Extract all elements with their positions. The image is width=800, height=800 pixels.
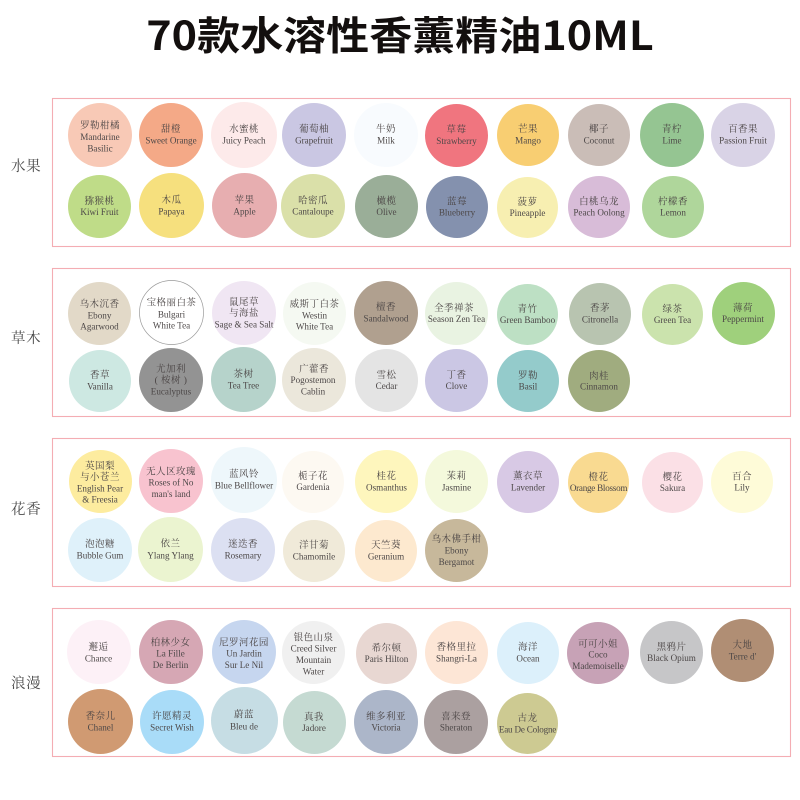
swatch: Milk: [354, 103, 418, 167]
swatch: Juicy Peach: [211, 102, 277, 168]
swatch: Cantaloupe: Cantaloupe: [292, 207, 334, 217]
swatch: Olive: Olive: [376, 207, 397, 217]
swatch: Black Opium: 黑鸦片: [657, 641, 686, 653]
swatch: Clove: Clove: [446, 381, 467, 391]
swatch: Terre d': Terre d': [729, 651, 757, 661]
swatch: Lavender: 薰衣草: [513, 470, 543, 482]
swatch: Terre d': [711, 619, 774, 682]
swatch: Green Tea: Green Tea: [654, 315, 691, 325]
swatch: Shangri-La: 香格里拉: [437, 641, 476, 653]
swatch: Westin White Tea: 威斯丁白茶: [290, 298, 339, 310]
swatch: Chanel: [68, 689, 133, 754]
swatch: Mandarine Basilic: 罗勒柑橘: [80, 120, 120, 132]
swatch: Mandarine Basilic: Mandarine: [80, 132, 120, 142]
swatch: Cantaloupe: 哈密瓜: [298, 194, 328, 206]
swatch: Apple: [212, 173, 277, 238]
swatch: Coco Mademoiselle: 可可小姐: [578, 638, 618, 650]
swatch: Lily: Lily: [734, 483, 750, 493]
swatch: Jasmine: 茉莉: [447, 470, 466, 482]
swatch: Clove: 丁香: [447, 369, 466, 381]
swatch: Chance: Chance: [85, 653, 112, 663]
swatch: Jasmine: [425, 450, 488, 513]
swatch: Sage & Sea Salt: Sage & Sea Salt: [215, 319, 274, 329]
swatch: Jadore: [283, 691, 346, 754]
swatch: Juicy Peach: Juicy Peach: [222, 136, 266, 146]
swatch: Lily: 百合: [732, 470, 752, 482]
swatch: Chamomile: 洋甘菊: [299, 539, 329, 551]
swatch: Papaya: [139, 173, 204, 238]
swatch: Un Jardin Sur Le Nil: Sur Le Nil: [225, 660, 264, 670]
swatch: Chamomile: Chamomile: [293, 551, 335, 561]
swatch: Eucalyptus: [139, 348, 203, 412]
swatch: Ocean: [497, 622, 559, 684]
swatch: Bubble Gum: Bubble Gum: [77, 551, 123, 561]
swatch: Ylang Ylang: 依兰: [161, 538, 180, 550]
swatch: Tea Tree: [211, 347, 276, 412]
swatch: Green Bamboo: 青竹: [518, 303, 537, 315]
swatch: Sheraton: 喜来登: [441, 710, 471, 722]
swatch: Eau De Cologne: [497, 693, 558, 754]
swatch: Bleu de: Bleu de: [230, 721, 258, 731]
swatch: Blue Bellflower: Blue Bellflower: [215, 481, 273, 491]
swatch: Blueberry: Blueberry: [439, 207, 476, 217]
swatch: Eucalyptus: 尤加利: [156, 363, 186, 375]
swatch: Creed Silver Mountain Water: Water: [303, 666, 324, 676]
swatch: Gardenia: [282, 451, 344, 513]
heading: 水果: 水果: [11, 158, 41, 175]
swatch: English Pear & Freesia: 与小苍兰: [80, 471, 120, 483]
swatch: Sweet Orange: [139, 103, 203, 167]
swatch: Geranium: 天竺葵: [371, 539, 401, 551]
swatch: Season Zen Tea: [425, 282, 488, 345]
swatch: Black Opium: [640, 621, 703, 684]
swatch: Sakura: [642, 452, 703, 513]
swatch: Lily: [711, 451, 773, 513]
swatch: Jadore: Jadore: [302, 723, 326, 733]
swatch: Osmanthus: Osmanthus: [366, 482, 407, 492]
swatch: Pogostemon Cablin: 广藿香: [299, 363, 329, 375]
panel: 花香: [52, 438, 790, 586]
swatch: Cantaloupe: [281, 174, 345, 238]
swatch: Westin White Tea: [283, 282, 346, 345]
swatch: Roses of No man's land: [139, 449, 203, 513]
swatch: Eau De Cologne: 古龙: [518, 712, 537, 724]
swatch: Ebony Agarwood: Agarwood: [80, 322, 119, 332]
swatch: Osmanthus: 桂花: [377, 470, 396, 482]
swatch: Paris Hilton: 希尔顿: [372, 642, 401, 654]
swatch: Ebony Agarwood: [68, 282, 131, 345]
swatch: Lime: Lime: [662, 135, 682, 145]
swatch: Paris Hilton: [356, 623, 417, 684]
swatch: Sheraton: [424, 690, 488, 754]
swatch: Creed Silver Mountain Water: Mountain: [296, 655, 332, 665]
swatch: Ylang Ylang: Ylang Ylang: [147, 550, 194, 560]
swatch: Roses of No man's land: man's land: [152, 489, 191, 499]
swatch: Un Jardin Sur Le Nil: Un Jardin: [226, 649, 262, 659]
swatch: Vanilla: 香草: [90, 369, 110, 381]
swatch: Un Jardin Sur Le Nil: 尼罗河花园: [219, 636, 269, 648]
swatch: Cinnamon: Cinnamon: [580, 382, 618, 392]
swatch: La Fille De Berlin: De Berlin: [153, 660, 189, 670]
swatch: Creed Silver Mountain Water: Creed Silver: [291, 644, 336, 654]
swatch: Tea Tree: 茶树: [234, 368, 253, 380]
swatch: Bulgari White Tea: Bulgari: [158, 309, 186, 319]
swatch: Clove: [425, 349, 488, 412]
swatch: Apple: Apple: [233, 206, 256, 216]
swatch: Season Zen Tea: 全季禅茶: [434, 302, 474, 314]
swatch: English Pear & Freesia: 英国梨: [85, 460, 115, 472]
swatch: Eucalyptus: Eucalyptus: [151, 387, 192, 397]
swatch: Terre d': 大地: [733, 639, 752, 651]
swatch: Paris Hilton: Paris Hilton: [365, 654, 409, 664]
swatch: Roses of No man's land: 无人区玫瑰: [146, 466, 196, 478]
swatch: Basil: [497, 350, 559, 412]
swatch: Olive: [355, 175, 418, 238]
swatch: Strawberry: [425, 104, 488, 167]
swatch: Blue Bellflower: 蓝风铃: [229, 468, 259, 480]
swatch: Milk: 牛奶: [376, 123, 396, 135]
swatch: Coco Mademoiselle: Mademoiselle: [572, 661, 624, 671]
swatch: Kiwi Fruit: [68, 175, 131, 238]
swatch: Ocean: 海洋: [518, 641, 538, 653]
swatch: Sakura: 樱花: [663, 471, 682, 483]
swatch: Secret Wish: 许愿精灵: [152, 710, 192, 722]
swatch: Geranium: Geranium: [368, 551, 404, 561]
swatch: Papaya: Papaya: [158, 206, 185, 216]
swatch: Citronella: [569, 283, 631, 345]
swatch: Roses of No man's land: Roses of No: [149, 478, 194, 488]
swatch: Blueberry: [426, 176, 488, 238]
swatch: Strawberry: Strawberry: [436, 136, 477, 146]
swatch: Secret Wish: Secret Wish: [150, 723, 194, 733]
swatch: Ebony Agarwood: 乌木沉香: [80, 298, 119, 310]
swatch: Kiwi Fruit: Kiwi Fruit: [80, 207, 119, 217]
swatch: Blueberry: 蓝莓: [447, 196, 467, 208]
swatch: Victoria: [354, 690, 418, 754]
swatch: Chamomile: [283, 520, 345, 582]
swatch: English Pear & Freesia: [69, 450, 132, 513]
swatch: Lavender: Lavender: [511, 483, 545, 493]
swatch: Cedar: Cedar: [376, 381, 397, 391]
swatch: Secret Wish: [140, 690, 204, 754]
swatch: Shangri-La: Shangri-La: [436, 653, 477, 663]
swatch: Citronella: Citronella: [582, 314, 618, 324]
swatch: Mango: 芒果: [518, 123, 538, 135]
swatch: Lemon: 柠檬香: [658, 196, 688, 208]
swatch: Ebony Bergamot: [425, 519, 488, 582]
swatch: Bulgari White Tea: 宝格丽白茶: [147, 296, 196, 308]
swatch: Sakura: Sakura: [660, 483, 685, 493]
swatch: Gardenia: 栀子花: [298, 470, 328, 482]
swatch: Peach Oolong: 白桃乌龙: [579, 196, 619, 208]
swatch: Bulgari White Tea: [140, 280, 204, 344]
swatch: Bleu de: [211, 687, 278, 754]
swatch: Sage & Sea Salt: 与海盐: [229, 307, 259, 319]
swatch: Mango: Mango: [515, 135, 541, 145]
swatch: Season Zen Tea: Season Zen Tea: [428, 314, 485, 324]
swatch: Creed Silver Mountain Water: [282, 621, 345, 684]
swatch: Peppermint: Peppermint: [722, 314, 764, 324]
swatch: Grapefruit: [282, 103, 346, 167]
swatch: La Fille De Berlin: La Fille: [156, 649, 185, 659]
swatch: Pineapple: [497, 177, 558, 238]
swatch: Bubble Gum: [68, 518, 132, 582]
swatch: Eucalyptus: ( 桉树 ): [155, 374, 187, 386]
swatch: Gardenia: Gardenia: [296, 482, 330, 492]
swatch: Green Bamboo: Green Bamboo: [500, 315, 556, 325]
swatch: Pogostemon Cablin: [282, 348, 346, 412]
swatch: Cinnamon: [568, 350, 630, 412]
swatch: Ebony Agarwood: Ebony: [88, 310, 112, 320]
swatch: Green Tea: [642, 284, 703, 345]
swatch: Passion Fruit: [711, 103, 775, 167]
panel: 草木: [52, 268, 790, 416]
swatch: Pogostemon Cablin: Pogostemon: [291, 375, 336, 385]
swatch: Sandalwood: Sandalwood: [364, 314, 409, 324]
swatch: Vanilla: Vanilla: [87, 381, 113, 391]
swatch: Pogostemon Cablin: Cablin: [301, 386, 326, 396]
swatch: Mango: [497, 104, 559, 166]
swatch: Peach Oolong: Peach Oolong: [573, 207, 625, 217]
swatch: Bleu de: 蔚蓝: [234, 708, 254, 720]
swatch: Cedar: 雪松: [377, 369, 396, 381]
swatch: Ebony Bergamot: 乌木佛手柑: [432, 533, 481, 545]
swatch: Pineapple: 菠萝: [518, 196, 537, 208]
swatch: Milk: Milk: [377, 136, 395, 146]
swatch: Apple: 苹果: [235, 194, 254, 206]
swatch: Shangri-La: [425, 621, 488, 684]
swatch: Sweet Orange: Sweet Orange: [145, 136, 197, 146]
swatch: Olive: 橄榄: [377, 195, 396, 207]
swatch: Bubble Gum: 泡泡糖: [85, 538, 115, 550]
heading: 浪漫: 浪漫: [11, 675, 41, 692]
swatch: Chanel: 香奈儿: [86, 710, 115, 722]
swatch: Peppermint: [712, 282, 775, 345]
swatch: Coco Mademoiselle: [567, 622, 629, 684]
swatch: Kiwi Fruit: 猕猴桃: [85, 195, 114, 207]
swatch: Passion Fruit: 百香果: [728, 123, 758, 135]
swatch: Westin White Tea: Westin: [302, 310, 327, 320]
swatch: Sage & Sea Salt: [212, 281, 276, 345]
swatch: Peppermint: 薄荷: [733, 302, 753, 314]
swatch: Mandarine Basilic: Basilic: [87, 143, 113, 153]
swatch: Bulgari White Tea: White Tea: [153, 321, 190, 331]
swatch: Un Jardin Sur Le Nil: [212, 620, 276, 684]
swatch: Ebony Bergamot: Bergamot: [439, 557, 475, 567]
swatch: Cinnamon: 肉桂: [589, 370, 609, 382]
swatch: Lime: [640, 103, 704, 167]
swatch: Coconut: Coconut: [584, 135, 615, 145]
swatch: Eau De Cologne: Eau De Cologne: [499, 724, 556, 734]
swatch: Orange Blossom: Orange Blossom: [570, 483, 627, 493]
swatch: Ylang Ylang: [138, 517, 203, 582]
swatch: Lime: 青柠: [662, 123, 682, 135]
swatch: Orange Blossom: [568, 452, 629, 513]
panel: 水果: [52, 98, 790, 246]
swatch: Mandarine Basilic: [68, 103, 132, 167]
swatch: Rosemary: 迷迭香: [228, 538, 258, 550]
swatch: Lemon: [642, 176, 704, 238]
swatch: Vanilla: [69, 350, 131, 412]
swatch: English Pear & Freesia: English Pear: [77, 483, 123, 493]
swatch: Citronella: 香茅: [590, 302, 610, 314]
swatch: English Pear & Freesia: & Freesia: [82, 494, 118, 504]
swatch: Chance: [67, 620, 131, 684]
heading: 草木: 草木: [11, 329, 41, 347]
swatch: Westin White Tea: White Tea: [296, 322, 333, 332]
heading: 花香: 花香: [11, 500, 41, 518]
swatch: Grapefruit: Grapefruit: [295, 136, 333, 146]
swatch: Geranium: [355, 520, 417, 582]
swatch: Lavender: [497, 451, 559, 513]
swatch: Orange Blossom: 橙花: [589, 471, 608, 483]
swatch: Green Bamboo: [497, 284, 558, 345]
swatch: Ebony Bergamot: Ebony: [445, 546, 469, 556]
swatch: Victoria: 维多利亚: [366, 710, 406, 722]
swatch: Coco Mademoiselle: Coco: [588, 650, 608, 660]
swatch: Basil: 罗勒: [518, 370, 538, 382]
swatch: Rosemary: [211, 518, 275, 582]
swatch: Black Opium: Black Opium: [647, 653, 696, 663]
swatch: Grapefruit: 葡萄柚: [299, 123, 329, 135]
swatch: Cedar: [355, 349, 418, 412]
swatch: Sandalwood: 檀香: [376, 301, 396, 313]
swatch: Rosemary: Rosemary: [225, 551, 262, 561]
swatch: Blue Bellflower: [211, 447, 277, 513]
swatch: Victoria: Victoria: [371, 723, 401, 733]
swatch: Pineapple: Pineapple: [510, 208, 545, 218]
swatch: Chanel: Chanel: [88, 722, 114, 732]
swatch: Coconut: 椰子: [589, 123, 609, 135]
swatch: Creed Silver Mountain Water: 银色山泉: [294, 632, 333, 644]
swatch: Sage & Sea Salt: 鼠尾草: [229, 296, 259, 308]
swatch: Coconut: [568, 104, 630, 166]
swatch: Chance: 邂逅: [89, 641, 108, 653]
swatch: Jadore: 真我: [304, 711, 324, 723]
swatch: Ocean: Ocean: [516, 653, 540, 663]
title: 70款水溶性香薰精油10ML: [146, 4, 654, 61]
swatch: Basil: Basil: [519, 381, 538, 391]
swatch: Passion Fruit: Passion Fruit: [719, 135, 767, 145]
swatch: Peach Oolong: [568, 176, 630, 238]
swatch: La Fille De Berlin: 柏林少女: [151, 636, 190, 648]
swatch: Juicy Peach: 水蜜桃: [229, 123, 259, 135]
panel: 浪漫: [52, 608, 790, 756]
swatch: Sandalwood: [354, 281, 418, 345]
swatch: Jasmine: Jasmine: [442, 482, 471, 492]
swatch: La Fille De Berlin: [139, 620, 203, 684]
swatch: Lemon: Lemon: [660, 207, 686, 217]
swatch: Tea Tree: Tea Tree: [228, 380, 259, 390]
swatch: Strawberry: 草莓: [447, 124, 466, 136]
swatch: Sweet Orange: 甜橙: [161, 123, 181, 135]
swatch: Green Tea: 绿茶: [663, 303, 682, 315]
swatch: Osmanthus: [355, 450, 418, 513]
swatch: Papaya: 木瓜: [162, 194, 181, 206]
swatch: Sheraton: Sheraton: [440, 723, 473, 733]
